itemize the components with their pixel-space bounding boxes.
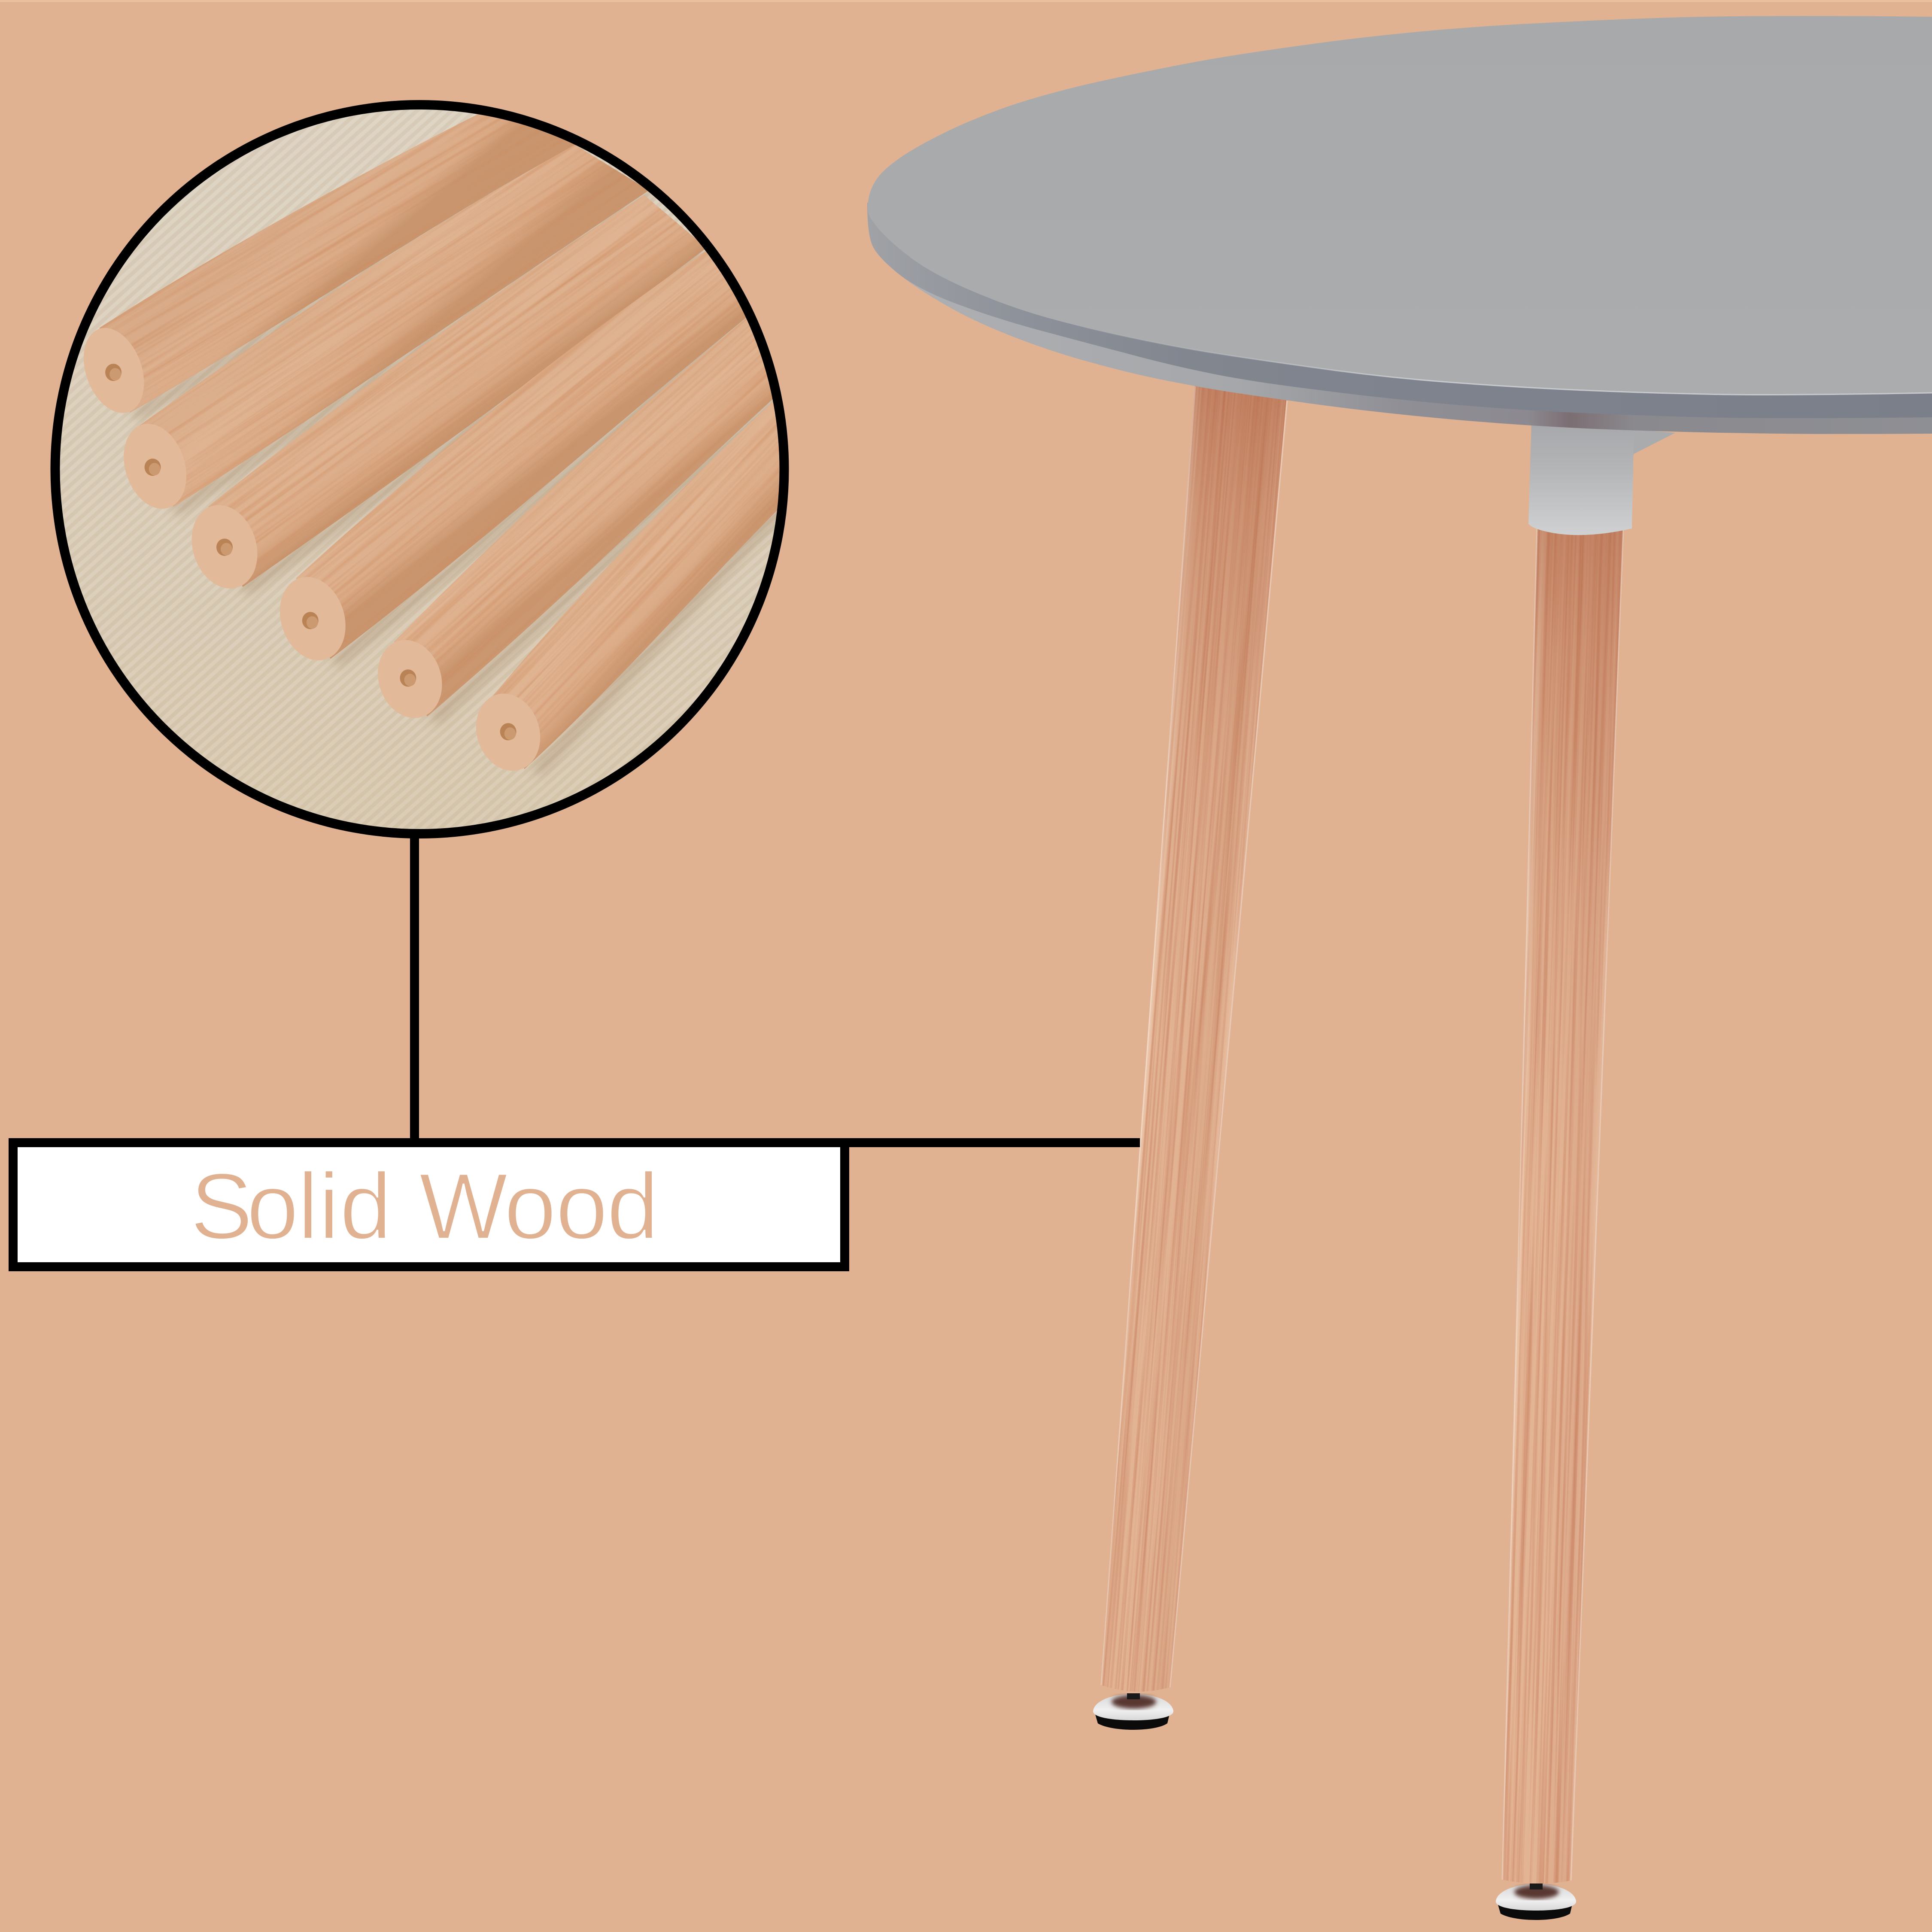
detail circle: wooden dowels on woven mat <box>51 100 789 838</box>
foot glide: right <box>1496 1883 1576 1920</box>
table top <box>867 16 1932 434</box>
foot glide: left <box>1093 1693 1173 1730</box>
wooden leg: left <box>1101 386 1288 1692</box>
label box: Solid Wood <box>13 1143 845 1267</box>
callout: connector from label to leg <box>841 1138 1140 1147</box>
mounting bracket <box>1528 423 1675 535</box>
wooden leg: right <box>1502 529 1624 1884</box>
dowel 1 <box>84 114 587 422</box>
dowel 3 <box>100 56 877 671</box>
dowel 4 <box>145 130 899 778</box>
dowel 6 <box>311 210 1002 928</box>
dowel 2 <box>21 5 819 601</box>
callout: connector from circle to label <box>410 833 419 1142</box>
label text: Solid Wood <box>190 1154 659 1259</box>
dowel 5 <box>222 176 947 846</box>
